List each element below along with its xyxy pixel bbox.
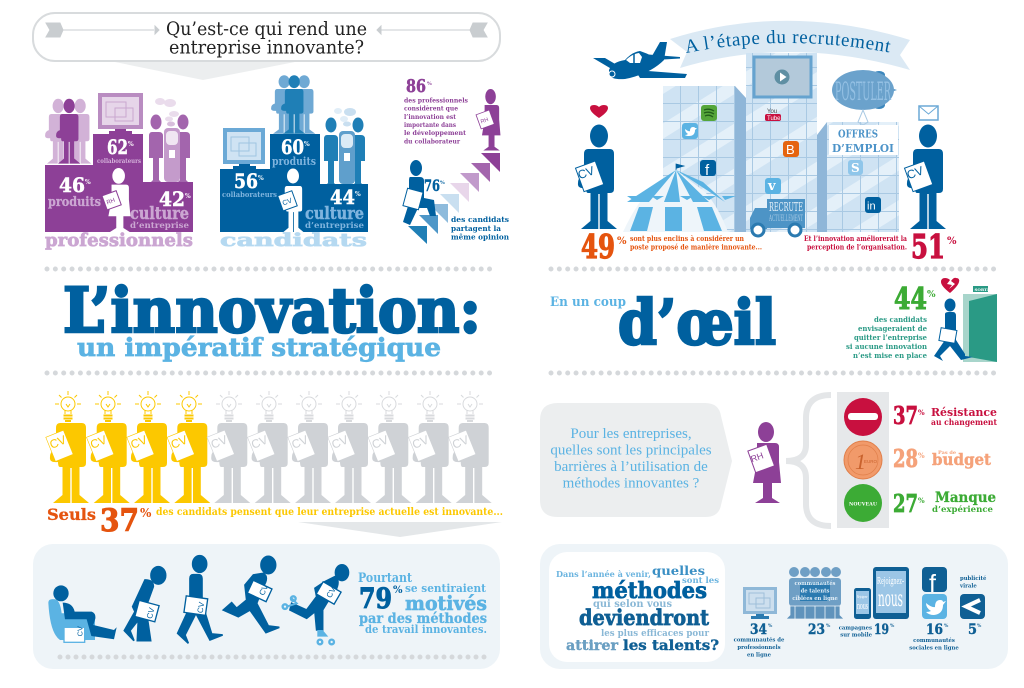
icon: nouveau badge: [844, 484, 882, 522]
icon: linkedin: [865, 197, 881, 213]
main title: L’innovation:: [63, 274, 481, 347]
question card: [549, 552, 725, 662]
arrow left: [46, 23, 159, 37]
icon: coin: [844, 441, 882, 479]
icon: no entry: [844, 398, 882, 436]
people at water cooler: [149, 98, 190, 184]
23% communautés de talents: de talents: [801, 588, 830, 594]
stat 60%: produits: [272, 155, 316, 168]
19% campagnes sur mobile: Rejoignez-: [857, 594, 868, 599]
running figure: [223, 556, 279, 633]
white figure CV: [278, 168, 304, 232]
video screen: [754, 57, 811, 97]
panel: a l'étape du recrutement: POSTULER: [835, 77, 891, 106]
5% publicité virale: 5: [968, 622, 977, 638]
question card: les talents?: [623, 638, 719, 654]
text 79%: [358, 571, 487, 636]
icon: blogger: [783, 141, 799, 157]
icon: vimeo: v: [767, 179, 776, 194]
monitor: [98, 93, 143, 134]
arrow right: [377, 23, 487, 37]
stat 62%: 62: [107, 135, 128, 159]
text 79%: Pourtant: [358, 571, 412, 586]
stat 60%: %: [304, 141, 310, 148]
grey figures: CV: [370, 433, 390, 452]
stat 86% text: le développement: [404, 130, 466, 137]
stat 28%: [893, 444, 992, 473]
stat 37%: %: [918, 408, 925, 417]
icon: youtube: You: [767, 109, 777, 115]
woman RH: RH: [480, 117, 490, 125]
question card: les plus efficaces pour: [601, 629, 709, 639]
text 79%: se sentiraient: [405, 581, 487, 595]
text 79%: %: [393, 585, 403, 596]
heading text: Qu’est-ce qui rend une: [166, 18, 367, 40]
panel background: [540, 544, 1008, 669]
stat 60%: [272, 135, 316, 168]
walking man: [934, 298, 973, 361]
walking figure: [178, 556, 223, 643]
grey figures: CV: [249, 433, 270, 452]
stat 46%: 46: [59, 173, 85, 197]
stat 42%: 42: [159, 187, 185, 211]
stat 44%: %: [355, 191, 361, 198]
grey column: [837, 392, 889, 528]
icon: twitter: [682, 123, 698, 139]
text 79%: motivés: [405, 591, 487, 615]
icon: vimeo: [765, 178, 781, 194]
stat 44%: [305, 185, 365, 231]
monitor: [223, 128, 265, 169]
34% communautés de professionnels: %: [768, 623, 773, 629]
stat 44%: n’est mise en place: [853, 351, 928, 360]
stooped figure: [124, 567, 166, 641]
stat 60%: 60: [281, 135, 304, 159]
stat 86% text: [404, 76, 468, 146]
19% campagnes sur mobile: nous: [878, 587, 903, 612]
stat 27%: %: [918, 496, 925, 505]
stat 44%: [846, 282, 936, 360]
stat 44%: des candidats: [874, 315, 927, 324]
stat 56%: collaborateurs: [222, 190, 277, 199]
stat 42%: culture: [130, 204, 189, 224]
question bubble: méthodes innovantes ?: [563, 476, 700, 492]
question card: méthodes: [592, 578, 707, 604]
stat 76%: des candidats: [451, 215, 509, 224]
19% campagnes sur mobile: %: [890, 623, 895, 629]
stat 49%: %: [617, 236, 627, 247]
stat 76%: 76: [424, 176, 440, 195]
stat 44%: d’entreprise: [305, 221, 365, 231]
stat 42%: [130, 187, 191, 231]
statement 37%: %: [140, 506, 152, 520]
white figure CV: CV: [282, 197, 293, 207]
airplane: [593, 42, 687, 79]
circus tent: [623, 164, 736, 232]
panel background: [33, 544, 500, 669]
stat 56%: 56: [234, 169, 258, 193]
stat 44%: envisageraient de: [858, 324, 928, 333]
stat 44%: si aucune innovation: [846, 342, 927, 351]
panel: 44% leave: [846, 278, 997, 362]
stat 86% text: des professionnels: [404, 98, 468, 104]
23% communautés de talents: 23: [808, 622, 825, 638]
running figure: CV: [257, 582, 271, 597]
16% communautés sociales: [909, 567, 959, 652]
question card: attirer: [566, 638, 619, 654]
5% publicité virale: %: [977, 623, 982, 629]
grey figures: [207, 391, 492, 503]
stat 37%: 37: [893, 401, 918, 430]
text 79%: 79: [359, 582, 392, 615]
icon: broken heart: [941, 278, 959, 293]
question bubble: barrières à l’utilisation de: [554, 459, 708, 475]
stat 76%: même opinion: [451, 232, 509, 242]
yellow figures: CV: [88, 433, 109, 452]
stat 51%: [804, 227, 957, 266]
social icons: [682, 105, 881, 213]
stat 27%: d’expérience: [932, 504, 994, 515]
offres d'emploi sign: OFFRES: [838, 128, 878, 140]
icon: skype: [848, 160, 863, 175]
pictogram row: 37% of candidates: [46, 391, 503, 539]
yellow figures: CV: [128, 433, 149, 452]
group of three people: [45, 99, 91, 164]
people at water cooler: [324, 108, 365, 187]
19% campagnes sur mobile: 19: [874, 622, 889, 638]
19% campagnes sur mobile: Rejoignez-: [877, 575, 904, 587]
roller figure: CV: [325, 585, 338, 599]
stat 28%: budget: [932, 450, 992, 469]
23% communautés de talents: [786, 567, 844, 638]
icon: nouveau badge: NOUVEAU: [849, 502, 878, 508]
icon: skype: S: [851, 161, 860, 175]
icon: youtube: [765, 109, 781, 122]
question card: quelles: [652, 563, 705, 578]
candidate right with envelope: CV: [905, 163, 925, 182]
icon: linkedin: in: [867, 200, 876, 212]
16% communautés sociales: communautés: [913, 637, 955, 644]
podium blocks: [45, 134, 193, 232]
stat 27%: Manque: [935, 490, 996, 506]
grey figures: CV: [329, 433, 350, 452]
stat 42%: d’entreprise: [130, 221, 190, 231]
stat 44%: 44: [330, 185, 355, 209]
23% communautés de talents: ciblées en ligne: [792, 595, 838, 602]
34% communautés de professionnels: communautés de: [734, 636, 785, 644]
question bubble: quelles sont les principales: [550, 442, 712, 458]
question card: qui selon vous: [593, 598, 672, 610]
stat 86% text: l’innovation est: [404, 114, 456, 121]
statement 37%: des candidats pensent que leur entreprise actuelle est innovante...: [156, 507, 503, 518]
grey figures: CV: [410, 433, 431, 452]
figures from armchair to roller skates: [48, 556, 349, 644]
woman RH: RH: [749, 450, 765, 464]
icon: facebook: f: [705, 162, 710, 179]
panel: 79% motivés: [33, 544, 500, 669]
34% communautés de professionnels: en ligne: [747, 652, 772, 658]
icon: blogger: B: [786, 142, 795, 157]
19% campagnes sur mobile: [839, 567, 909, 638]
group of three people: [271, 75, 315, 134]
stat 46%: %: [85, 179, 91, 186]
icon: facebook: [700, 160, 716, 179]
podium blocks: [220, 134, 368, 232]
offres d'emploi sign: D’EMPLOI: [832, 142, 894, 155]
stat 28%: %: [918, 451, 925, 460]
stat 42%: %: [185, 193, 191, 200]
banner: [670, 20, 910, 70]
19% campagnes sur mobile: nous: [857, 601, 868, 612]
stat 46%: produits: [48, 195, 101, 210]
heading text: entreprise innovante?: [169, 36, 364, 58]
heading box: [33, 13, 500, 61]
candidate left with heart: [575, 105, 617, 229]
pointer: [298, 522, 502, 537]
truck: [750, 199, 805, 236]
stat 56%: [222, 169, 277, 199]
blimp postuler: [832, 70, 897, 125]
5% publicité virale: publicité: [960, 575, 987, 582]
heading: en un coup d'oeil: En un coup: [550, 295, 626, 310]
label candidats: candidats: [220, 230, 367, 251]
grey figures: CV: [450, 433, 471, 452]
23% communautés de talents: communautés: [795, 580, 836, 587]
question bubble: Pour les entreprises,: [570, 426, 692, 442]
candidate left with heart: CV: [576, 163, 596, 182]
stat 44%: %: [927, 290, 936, 300]
woman RH: [748, 422, 781, 503]
buildings: [663, 53, 899, 232]
stat 37%: Résistance: [931, 405, 997, 419]
text 79%: par des méthodes: [359, 611, 487, 627]
panel: méthodes les plus efficaces: [540, 544, 1008, 669]
climbing man: [403, 160, 436, 225]
walking figure: CV: [196, 601, 206, 614]
34% communautés de professionnels: [734, 587, 785, 658]
stat 27%: 27: [893, 489, 918, 518]
stat 51%: perception de l’organisation.: [807, 242, 907, 252]
exit door: [963, 286, 997, 362]
question card: Dans l’année à venir,: [556, 569, 651, 579]
stat 86% text: importante dans: [404, 122, 456, 129]
truck: ACTUELLEMENT: [769, 213, 803, 223]
stat 49%: sont plus enclins à considérer un: [630, 234, 745, 243]
stat 76%: partagent la: [451, 224, 501, 233]
statement 37%: 37: [100, 503, 139, 539]
23% communautés de talents: %: [826, 623, 831, 629]
roller figure: [283, 564, 349, 644]
stat 86% text: du collaborateur: [404, 138, 461, 146]
stat 86% text: %: [427, 81, 432, 87]
16% communautés sociales: f: [929, 570, 936, 598]
stat 27%: [893, 489, 996, 518]
banner: A l’étape du recrutement: [686, 30, 890, 53]
heading: en un coup d'oeil: d’œil: [618, 286, 776, 359]
question card: deviendront: [579, 605, 709, 630]
stat 49%: [581, 227, 762, 266]
podium: professionnels: [45, 93, 193, 251]
stat 44%: culture: [305, 204, 364, 224]
truck: RECRUTE: [769, 200, 803, 214]
stat 44%: 44: [894, 282, 927, 317]
yellow figures: [46, 391, 210, 503]
stat 51%: %: [947, 236, 957, 247]
stat 51%: 51: [911, 227, 945, 266]
5% publicité virale: virale: [959, 584, 977, 590]
exit door: SORTIE: [974, 287, 992, 292]
white figure RH: [102, 168, 130, 232]
5% publicité virale: [959, 575, 987, 638]
19% campagnes sur mobile: campagnes: [839, 626, 872, 632]
yellow figures: CV: [47, 433, 68, 452]
woman RH: [476, 89, 500, 151]
panel: 86% and 76% staircase: [403, 76, 509, 244]
question bubble: [540, 403, 732, 517]
icon: coin: 1: [855, 449, 866, 474]
stat 37%: [893, 401, 997, 430]
stat 37%: au changement: [931, 417, 997, 427]
16% communautés sociales: %: [944, 623, 949, 629]
candidate right with envelope: [904, 106, 946, 229]
34% communautés de professionnels: 34: [750, 622, 767, 638]
stat 76%: [424, 176, 509, 242]
staircase: [408, 153, 500, 244]
icon: spotify: [701, 105, 717, 121]
stat 46%: [48, 173, 101, 210]
stat 62%: [97, 135, 141, 165]
icon: youtube: Tube: [767, 116, 781, 122]
stat 76%: %: [440, 180, 445, 186]
panel: barrières: [540, 392, 997, 528]
16% communautés sociales: 16: [926, 622, 943, 638]
stooped figure: CV: [145, 606, 157, 620]
grey figures: CV: [289, 433, 310, 452]
34% communautés de professionnels: professionnels: [737, 645, 781, 651]
question card: sont les: [682, 575, 719, 585]
stat 86% text: considèrent que: [404, 106, 458, 112]
stat 56%: %: [258, 175, 264, 182]
stat 28%: 28: [893, 444, 918, 473]
stat 49%: 49: [581, 227, 615, 266]
stat 86% text: 86: [406, 76, 426, 97]
icon: coin: EURO: [864, 459, 878, 464]
stat 62%: collaborateurs: [97, 158, 141, 165]
callout pointer: [110, 61, 300, 80]
stat 28%: Pas de: [938, 450, 956, 456]
stat 49%: poste proposé de manière innovante...: [630, 242, 762, 252]
heading: en un coup d'oeil: [550, 286, 776, 359]
label professionnels: professionnels: [45, 230, 193, 251]
text 79%: de travail innovantes.: [365, 623, 487, 636]
podium: candidats: [220, 75, 368, 251]
brace: [786, 395, 831, 526]
16% communautés sociales: sociales en ligne: [909, 646, 959, 652]
offres d'emploi sign: [829, 125, 898, 155]
statement 37%: Seuls: [47, 505, 96, 524]
armchair figure: [48, 585, 117, 642]
main title: un impératif stratégique: [77, 333, 441, 362]
stat 51%: Et l’innovation améliorerait la: [804, 234, 907, 243]
white figure RH: RH: [106, 198, 116, 206]
panel: a l'étape du recrutement: [574, 20, 957, 266]
grey figures: CV: [209, 432, 229, 452]
stat 44%: quitter l’entreprise: [854, 333, 928, 342]
yellow figures: CV: [169, 433, 189, 452]
stat 62%: %: [128, 141, 134, 148]
19% campagnes sur mobile: sur mobile: [840, 632, 873, 638]
armchair figure: CV: [75, 626, 84, 636]
statement 37%: [47, 503, 503, 539]
panel: qu'est-ce qui rend une entreprise innovante: [33, 13, 500, 80]
